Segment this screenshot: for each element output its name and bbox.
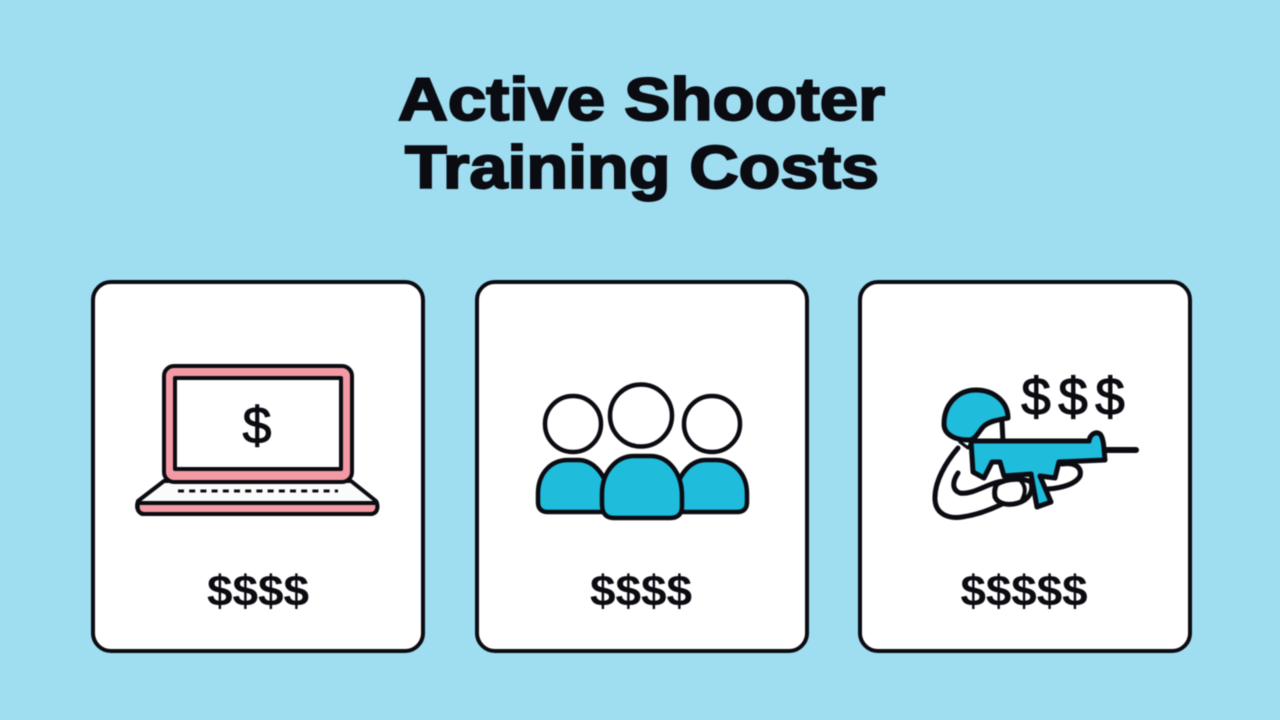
cost: live simulation: $$$$$ [960,567,1088,616]
soldier dollar signs: $ [1095,368,1125,427]
panel: group training [477,282,807,651]
icon: three people [538,384,747,518]
title: Training Costs [405,134,879,201]
soldier dollar signs: $ [1058,368,1088,427]
soldier dollar signs: $ [1021,368,1051,427]
icon: laptop [137,366,377,514]
title: Active Shooter [398,66,885,133]
cost: online training: $$$$ [207,567,309,616]
title [398,66,885,201]
soldier dollar signs [1021,368,1125,427]
cost: group training: $$$$ [590,567,692,616]
icon: soldier with rifle [935,390,1136,517]
laptop dollar sign: $ [243,397,272,455]
panel: live simulation [860,282,1190,651]
panel: online training [93,282,423,651]
